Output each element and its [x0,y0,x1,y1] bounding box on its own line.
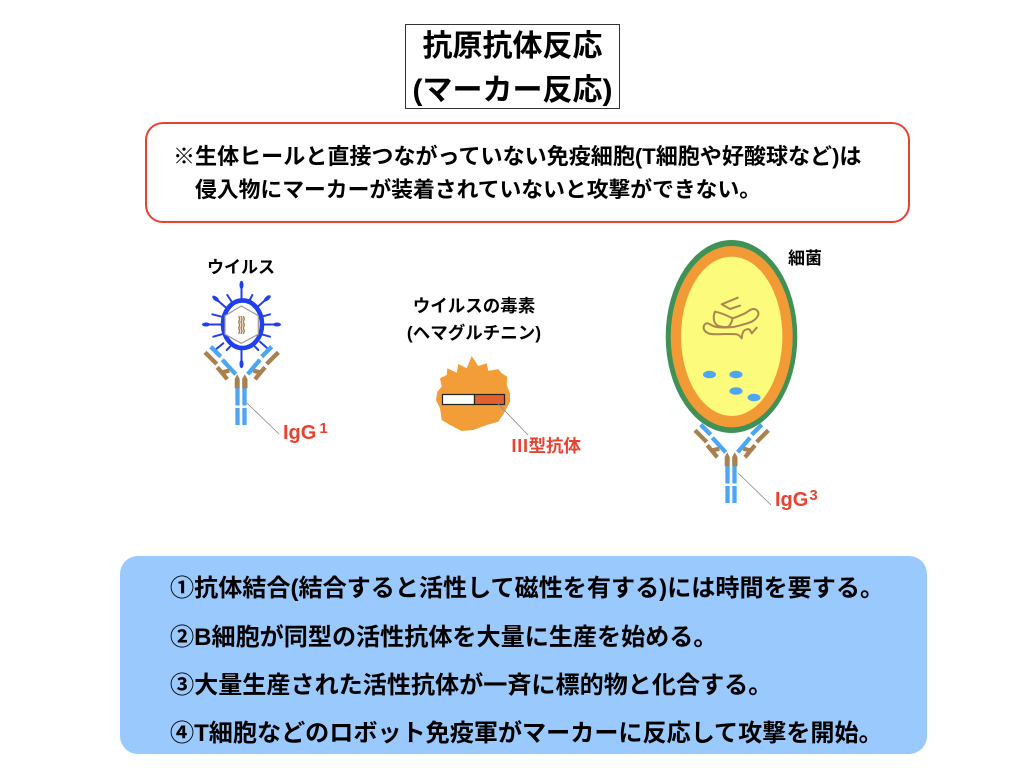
step 3: ③大量生産された活性抗体が一斉に標的物と化合する。 [170,672,772,699]
callout: note on immune cells [145,122,910,223]
label: virus toxin [407,296,541,343]
step 1: ①抗体結合(結合すると活性して磁性を有する)には時間を要する。 [170,575,884,602]
label: type III antibody: Ⅲ型抗体 [511,436,581,456]
label: IgG1: IgG1 [283,420,328,444]
icon: toxin (hemagglutinin) [436,356,510,431]
title: 抗原抗体反応 [422,30,602,63]
plasmids [703,371,760,401]
icon: IgG3 antibody [695,425,768,503]
icon: bacterium [666,240,797,433]
leader line: IgG3 [738,473,771,505]
label: virus toxin: ウイルスの毒素 [413,296,535,316]
label: bacterium: 細菌 [788,249,822,268]
leader line: type III antibody [497,402,528,435]
callout text line 2: 侵入物にマーカーが装着されていないと攻撃ができない。 [195,177,761,202]
label: virus toxin: (ヘマグルチニン) [407,323,541,343]
title: (マーカー反応) [412,74,612,107]
title [405,24,620,109]
label: virus: ウイルス [207,258,275,277]
callout text line 1: ※生体ヒールと直接つながっていない免疫細胞(T細胞や好酸球など)は [173,144,861,169]
step 4: ④T細胞などのロボット免疫軍がマーカーに反応して攻撃を開始。 [170,720,883,747]
icon: virus [202,281,281,368]
panel: reaction steps [120,556,927,754]
step 2: ②B細胞が同型の活性抗体を大量に生産を始める。 [170,624,717,651]
label: IgG3: IgG3 [775,486,818,511]
leader line: IgG1 [247,403,279,434]
DNA strand [704,298,758,338]
icon: IgG1 antibody [205,347,278,425]
